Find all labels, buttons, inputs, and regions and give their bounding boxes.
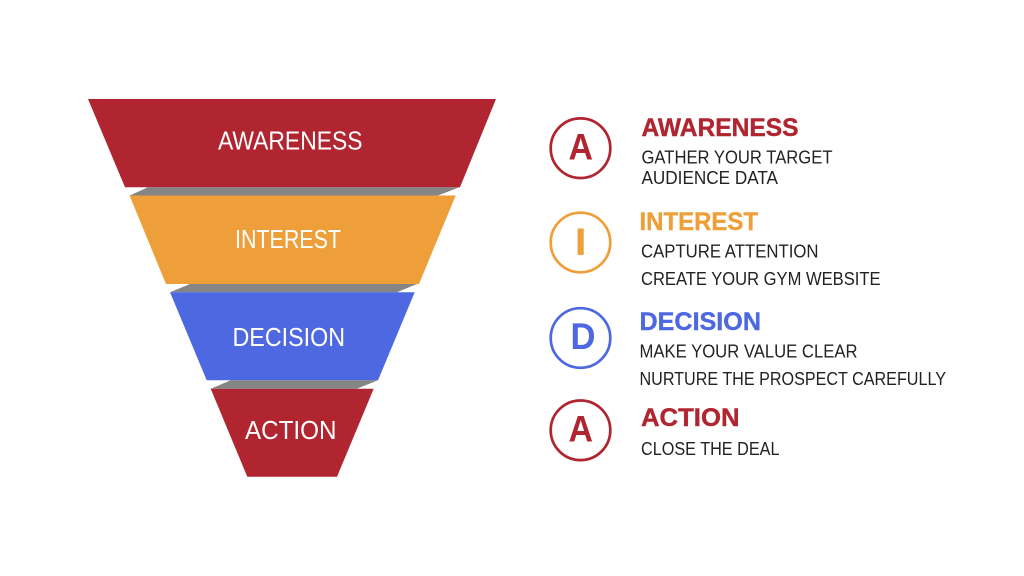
icon: letter D circle: D — [570, 316, 596, 357]
funnel layer: interest: INTEREST — [235, 224, 341, 254]
funnel connector: decision to action — [211, 380, 378, 389]
item: action — [551, 400, 780, 460]
item: interest — [551, 208, 880, 289]
funnel diagram — [88, 99, 496, 477]
text: action description: CLOSE THE DEAL — [641, 439, 780, 459]
icon: letter A circle — [551, 400, 610, 460]
funnel layer: action: ACTION — [245, 415, 336, 445]
funnel layer: decision — [170, 292, 415, 380]
heading: awareness: AWARENESS — [642, 114, 798, 142]
funnel connector: interest to decision — [170, 284, 417, 292]
funnel layer: decision: DECISION — [232, 322, 345, 352]
text: interest description: CREATE YOUR GYM WEBSITE — [641, 269, 880, 289]
text: decision description: NURTURE THE PROSPECT CAREFULLY — [640, 369, 946, 389]
funnel connector: awareness to interest — [130, 187, 459, 196]
heading: interest: INTEREST — [640, 208, 758, 236]
icon: letter A circle — [551, 118, 610, 178]
text: decision description — [640, 341, 946, 389]
text: awareness description — [642, 147, 832, 188]
icon: letter A circle: A — [568, 126, 593, 167]
text: interest description — [641, 241, 880, 289]
icon: letter D circle — [551, 308, 610, 368]
funnel layer: awareness — [88, 99, 496, 187]
text: interest description: CAPTURE ATTENTION — [641, 241, 818, 261]
item: decision — [551, 308, 946, 389]
funnel layer: interest — [130, 196, 456, 284]
item: awareness — [551, 114, 832, 188]
icon: letter I circle — [551, 213, 610, 272]
text: decision description: MAKE YOUR VALUE CLEAR — [640, 341, 858, 361]
funnel layer: awareness: AWARENESS — [218, 125, 362, 155]
funnel layer: action — [211, 389, 374, 477]
icon: letter A circle: A — [568, 409, 593, 450]
heading: decision: DECISION — [640, 308, 761, 336]
icon: letter I circle: I — [576, 221, 586, 262]
text: awareness description: AUDIENCE DATA — [642, 168, 778, 188]
text: awareness description: GATHER YOUR TARGET — [642, 147, 832, 167]
heading: action: ACTION — [641, 404, 740, 432]
